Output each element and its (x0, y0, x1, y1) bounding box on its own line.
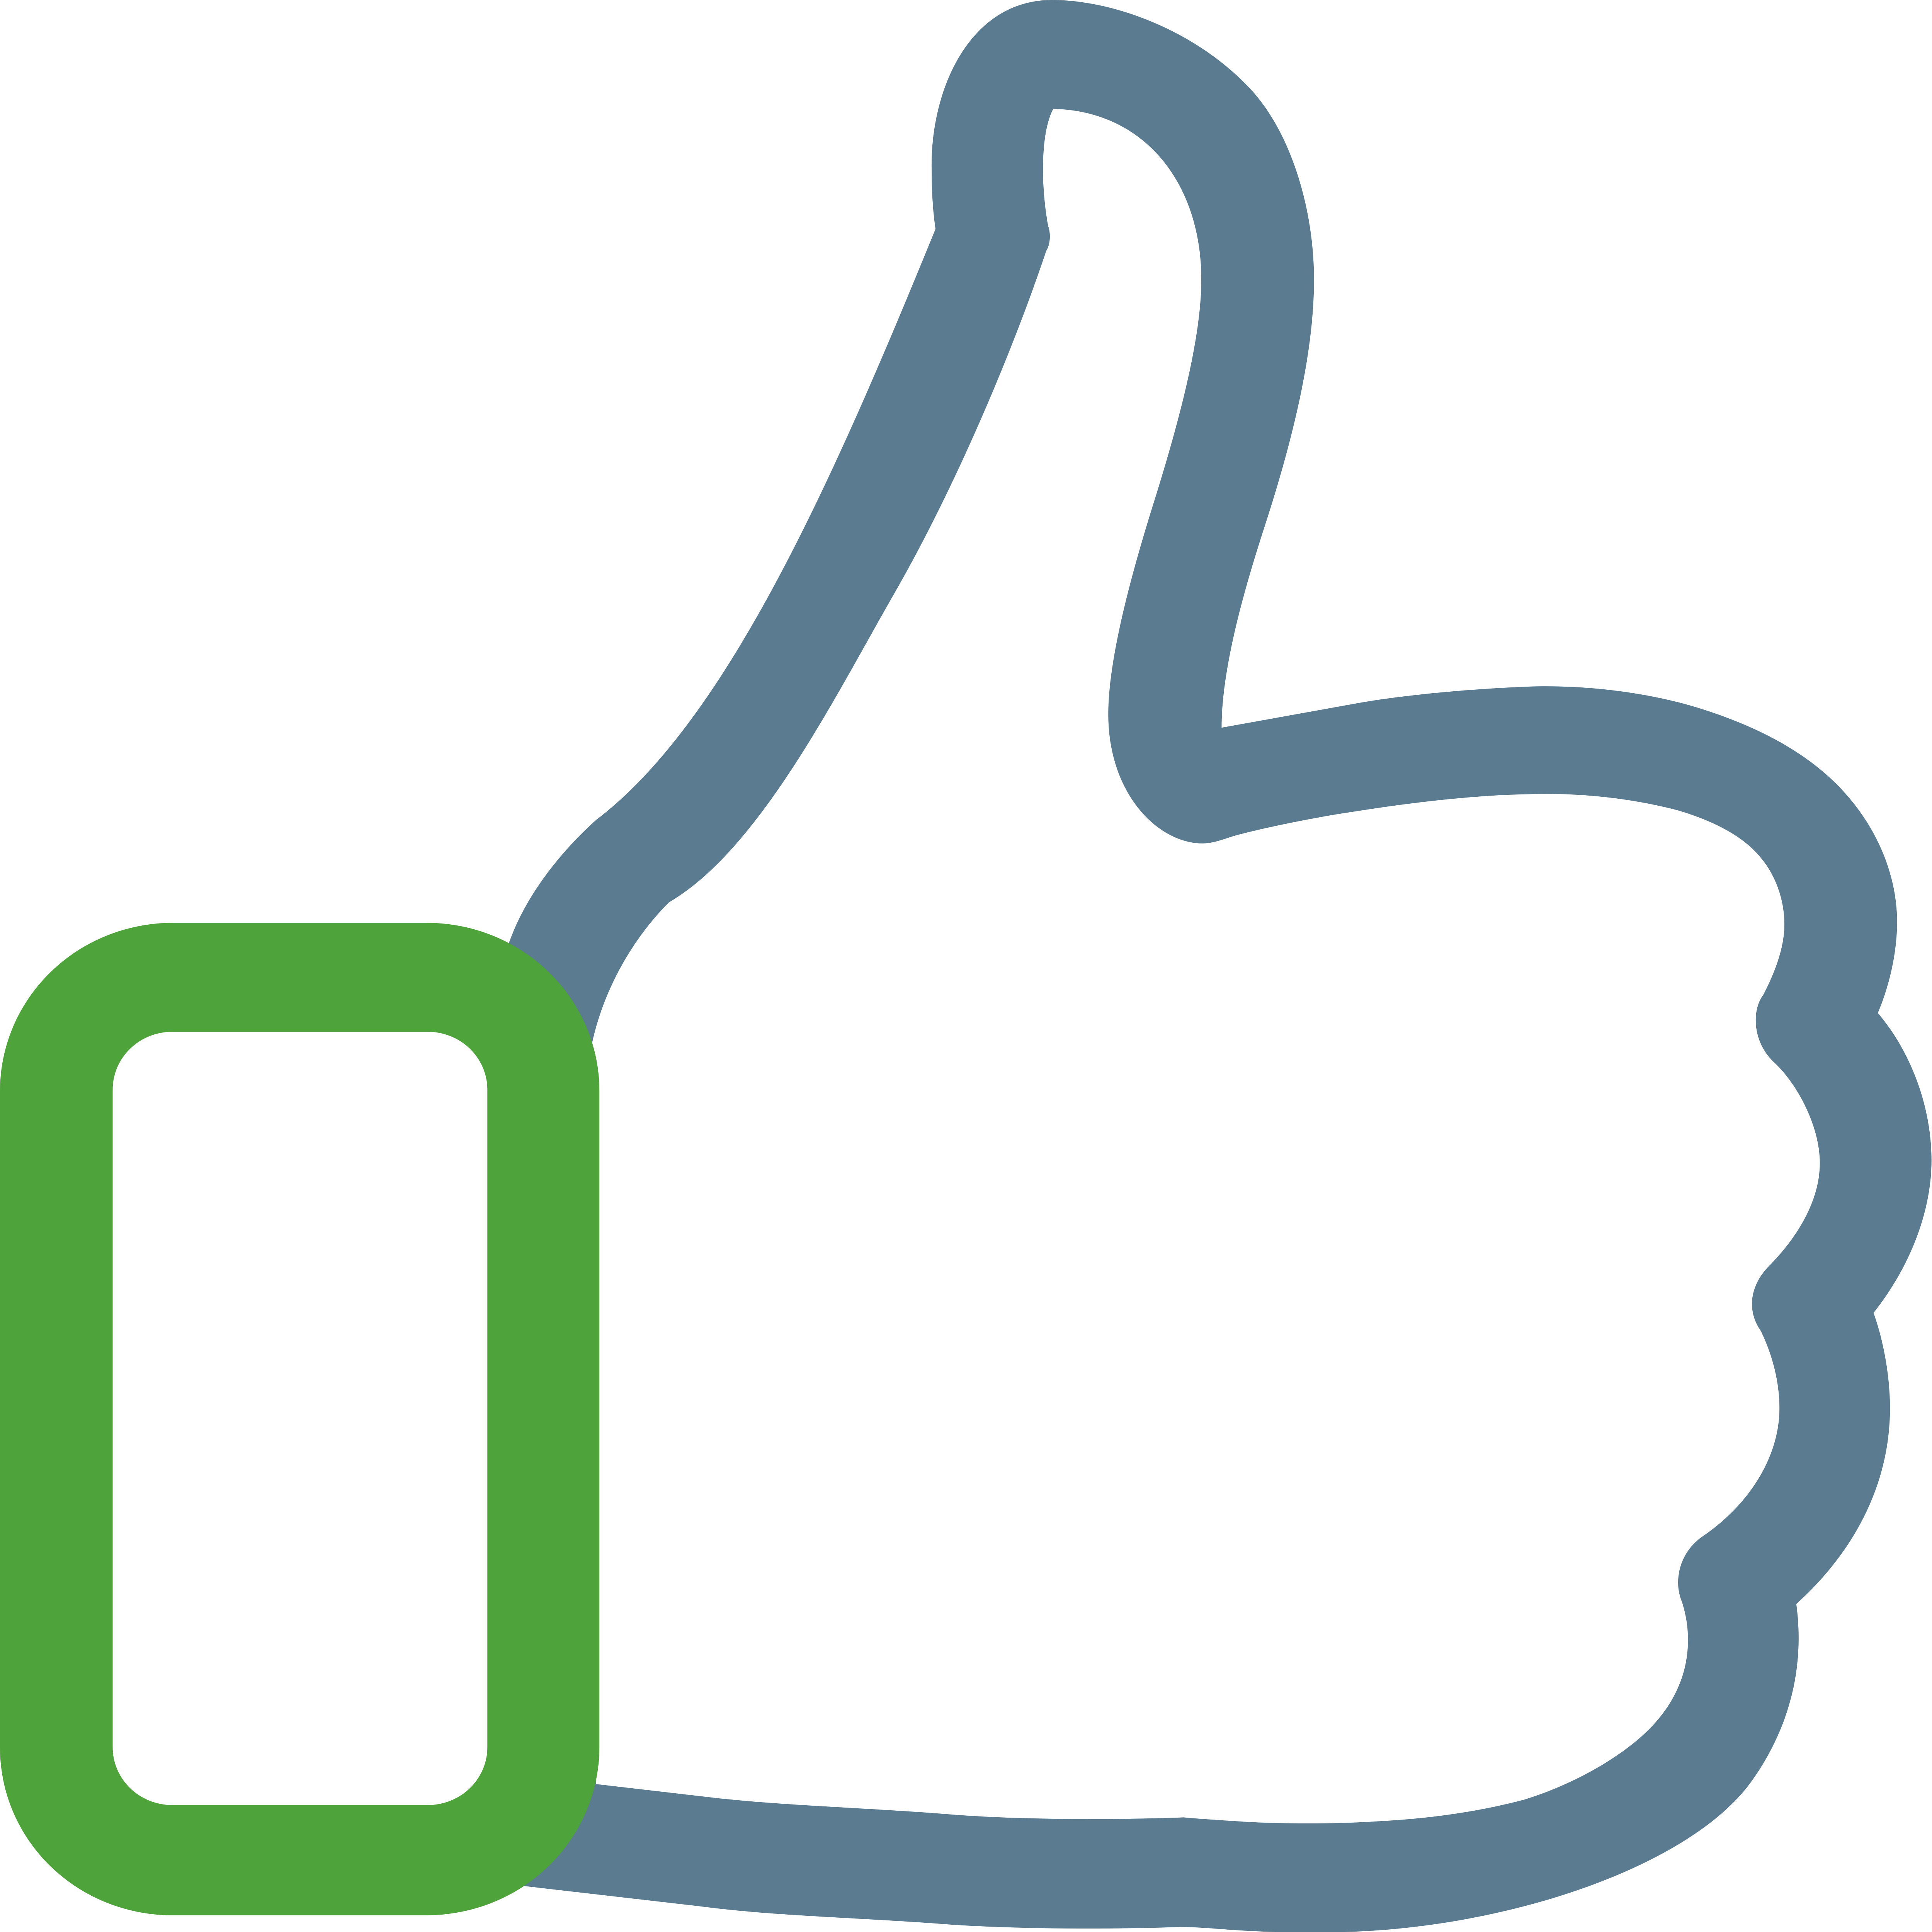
icon: green cuff rectangle (0, 923, 599, 1915)
icon: hand outline (506, 0, 1932, 1932)
